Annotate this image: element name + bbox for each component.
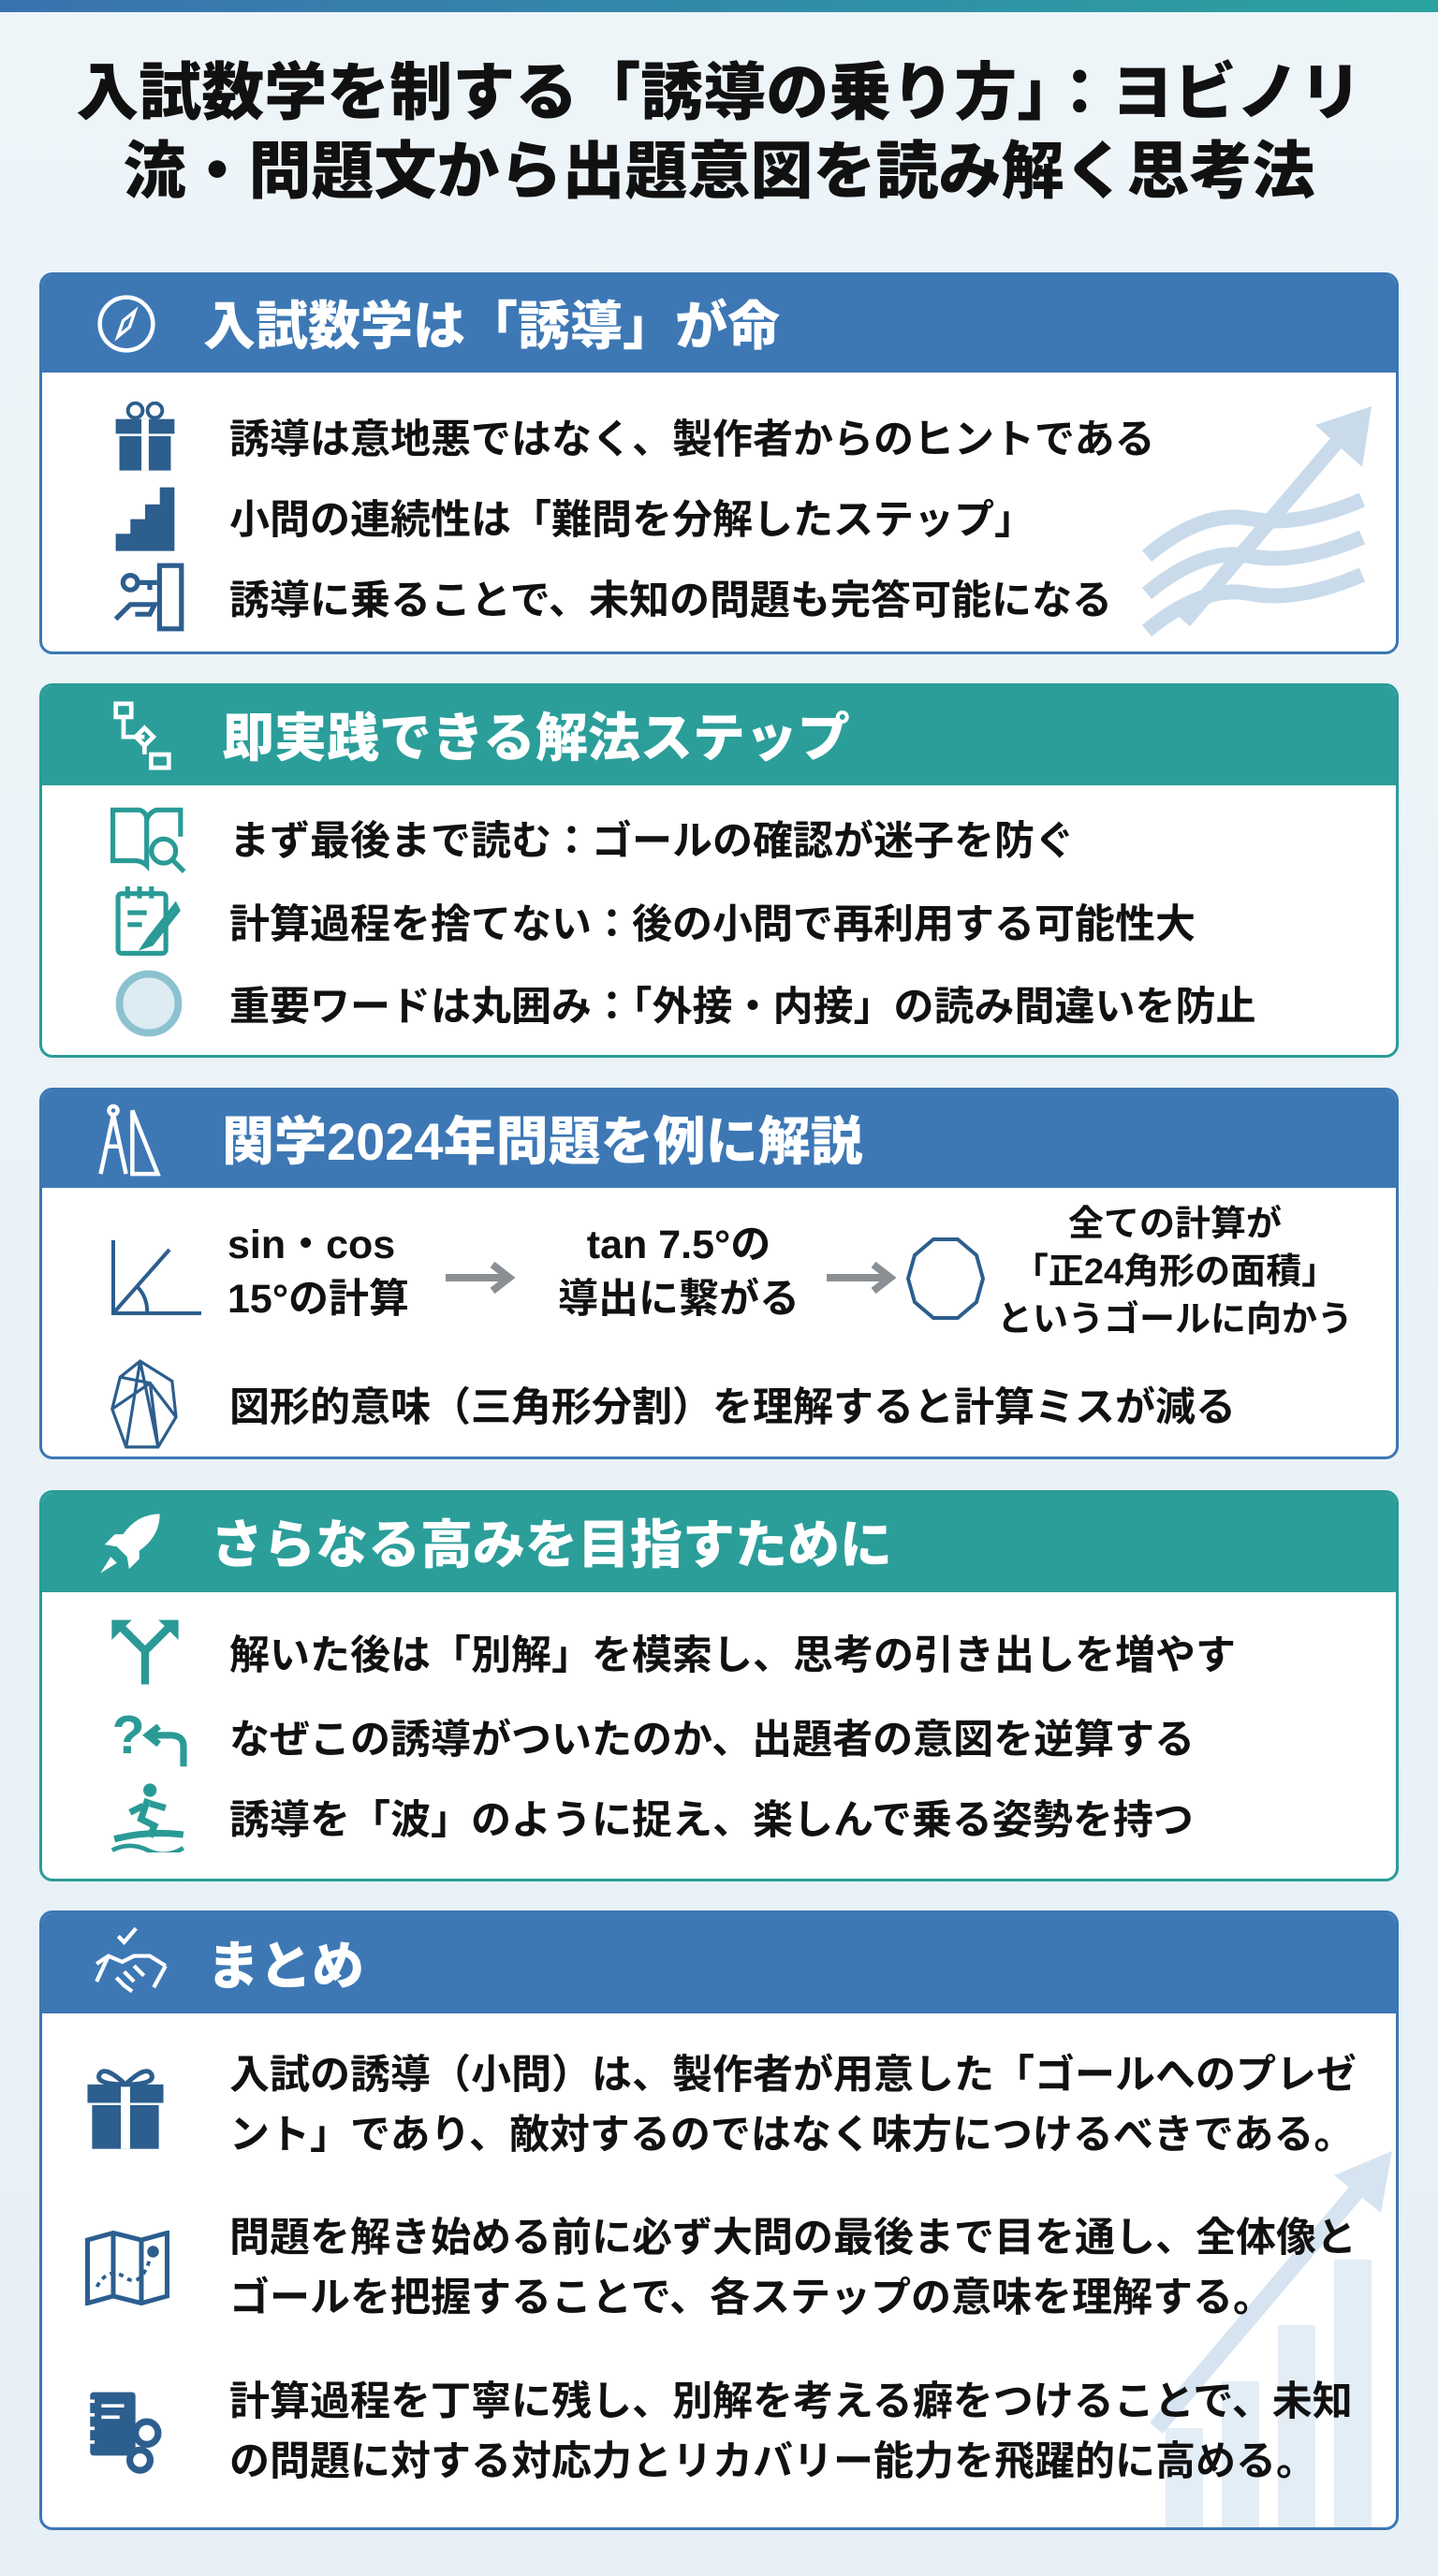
item 3: 重要ワードは丸囲み：「外接・内接」の読み間違いを防止: [229, 985, 1256, 1030]
item 2: 計算過程を捨てない：後の小問で再利用する可能性大: [229, 902, 1196, 947]
step: goal: [997, 1204, 1353, 1339]
summary 3: [42, 2371, 1396, 2493]
panel: 即実践できる解法ステップ: [39, 683, 1399, 1058]
item 1: 解いた後は「別解」を模索し、思考の引き出しを増やす: [229, 1633, 1236, 1678]
item 2: 小問の連続性は「難問を分解したステップ」: [229, 498, 1034, 543]
header: [42, 1913, 1396, 2013]
summary 2: 問題を解き始める前に必ず大問の最後まで目を通し、全体像と: [229, 2216, 1357, 2261]
icon: question back: [112, 1705, 187, 1767]
summary 2: ゴールを把握することで、各ステップの意味を理解する。: [229, 2276, 1273, 2320]
arrow: [827, 1262, 897, 1294]
decorative bar chart arrow: [1150, 2151, 1392, 2527]
item 1: 誘導は意地悪ではなく、製作者からのヒントである: [229, 417, 1155, 462]
header: [42, 1090, 1396, 1188]
item 1: [116, 402, 1155, 471]
step: sin cos: [227, 1222, 409, 1322]
item 3: 誘導に乗ることで、未知の問題も完答可能になる: [229, 578, 1112, 623]
icon: question back: ?: [112, 1705, 145, 1765]
flow row: [111, 1204, 1353, 1339]
panel: さらなる高み: [39, 1490, 1399, 1881]
step: sin cos: sin・cos: [227, 1222, 395, 1267]
item 3: [110, 1783, 1194, 1852]
summary 3: の問題に対する対応力とリカバリー能力を飛躍的に高める。: [229, 2439, 1316, 2484]
header: 関学2024年問題を例に解説: [222, 1112, 863, 1171]
icon: key door: [114, 564, 183, 631]
summary 2: [85, 2216, 1357, 2320]
item 2: [116, 886, 1196, 956]
item 2: なぜこの誘導がついたのか、出題者の意図を逆算する: [229, 1718, 1195, 1763]
summary 1: [87, 2053, 1357, 2158]
item 1: [111, 1619, 1236, 1685]
summary 1: ント」であり、敵対するのではなく味方につけるべきである。: [229, 2113, 1354, 2158]
arrow: [446, 1262, 515, 1294]
panel: まとめ: [39, 1910, 1399, 2530]
item 3: [116, 970, 1256, 1037]
header: [42, 275, 1396, 373]
icon: rocket: [101, 1514, 160, 1573]
step: tan: 導出に繋がる: [558, 1277, 800, 1322]
icon: circle: [116, 970, 182, 1037]
item 2: [112, 1705, 1195, 1767]
icon: compass and ruler: [98, 1105, 161, 1176]
title: 流・問題文から出題意図を読み解く思考法: [124, 137, 1314, 207]
icon: triangulated polygon: [110, 1359, 178, 1449]
item 3: 誘導を「波」のように捉え、楽しんで乗る姿勢を持つ: [229, 1798, 1194, 1843]
step: sin cos: 15°の計算: [227, 1277, 409, 1322]
step: tan: tan 7.5°の: [587, 1222, 770, 1267]
icon: map: [85, 2231, 169, 2305]
decorative wave arrow: [1142, 406, 1372, 637]
summary 1: 入試の誘導（小問）は、製作者が用意した「ゴールへのプレゼ: [229, 2053, 1357, 2098]
item: [110, 1359, 1236, 1449]
header: [42, 1493, 1396, 1592]
icon: compass: [97, 295, 155, 353]
summary 3: 計算過程を丁寧に残し、別解を考える癖をつけることで、未知: [229, 2379, 1353, 2424]
icon: surfer: [110, 1783, 184, 1852]
header: 入試数学は「誘導」が命: [203, 297, 780, 356]
icon: stairs: [116, 487, 174, 551]
item 2: [116, 487, 1034, 551]
header: まとめ: [207, 1936, 364, 1995]
panel: 関学2024年問題: [39, 1088, 1399, 1459]
icon: split arrows: [111, 1619, 179, 1685]
step: goal: というゴールに向かう: [997, 1300, 1353, 1339]
item 3: [114, 564, 1112, 631]
item: 図形的意味（三角形分割）を理解すると計算ミスが減る: [229, 1385, 1236, 1430]
panel: 入試数学は誘導が命: [39, 272, 1399, 654]
item 1: [110, 807, 1075, 873]
icon: notepad: [116, 886, 181, 956]
header: さらなる高みを目指すために: [211, 1515, 892, 1574]
icon: notebook gears: [83, 2390, 169, 2474]
item 1: まず最後まで読む：ゴールの確認が迷子を防ぐ: [229, 819, 1075, 864]
header: [42, 686, 1396, 785]
icon: angle: [111, 1240, 201, 1315]
icon: polygon: [906, 1237, 985, 1320]
icon: flowchart: [113, 701, 171, 770]
title: [76, 58, 1362, 207]
step: goal: 全ての計算が: [1068, 1205, 1282, 1244]
icon: gift: [87, 2069, 164, 2149]
step: goal: 「正24角形の面積」: [1013, 1252, 1337, 1292]
step: tan: [558, 1222, 800, 1322]
icon: book search: [110, 807, 185, 873]
header: 即実践できる解法ステップ: [222, 709, 850, 768]
icon: handshake: [95, 1926, 168, 1994]
title: 入試数学を制する「誘導の乗り方」：ヨビノリ: [76, 58, 1362, 128]
icon: gift: [116, 402, 174, 471]
